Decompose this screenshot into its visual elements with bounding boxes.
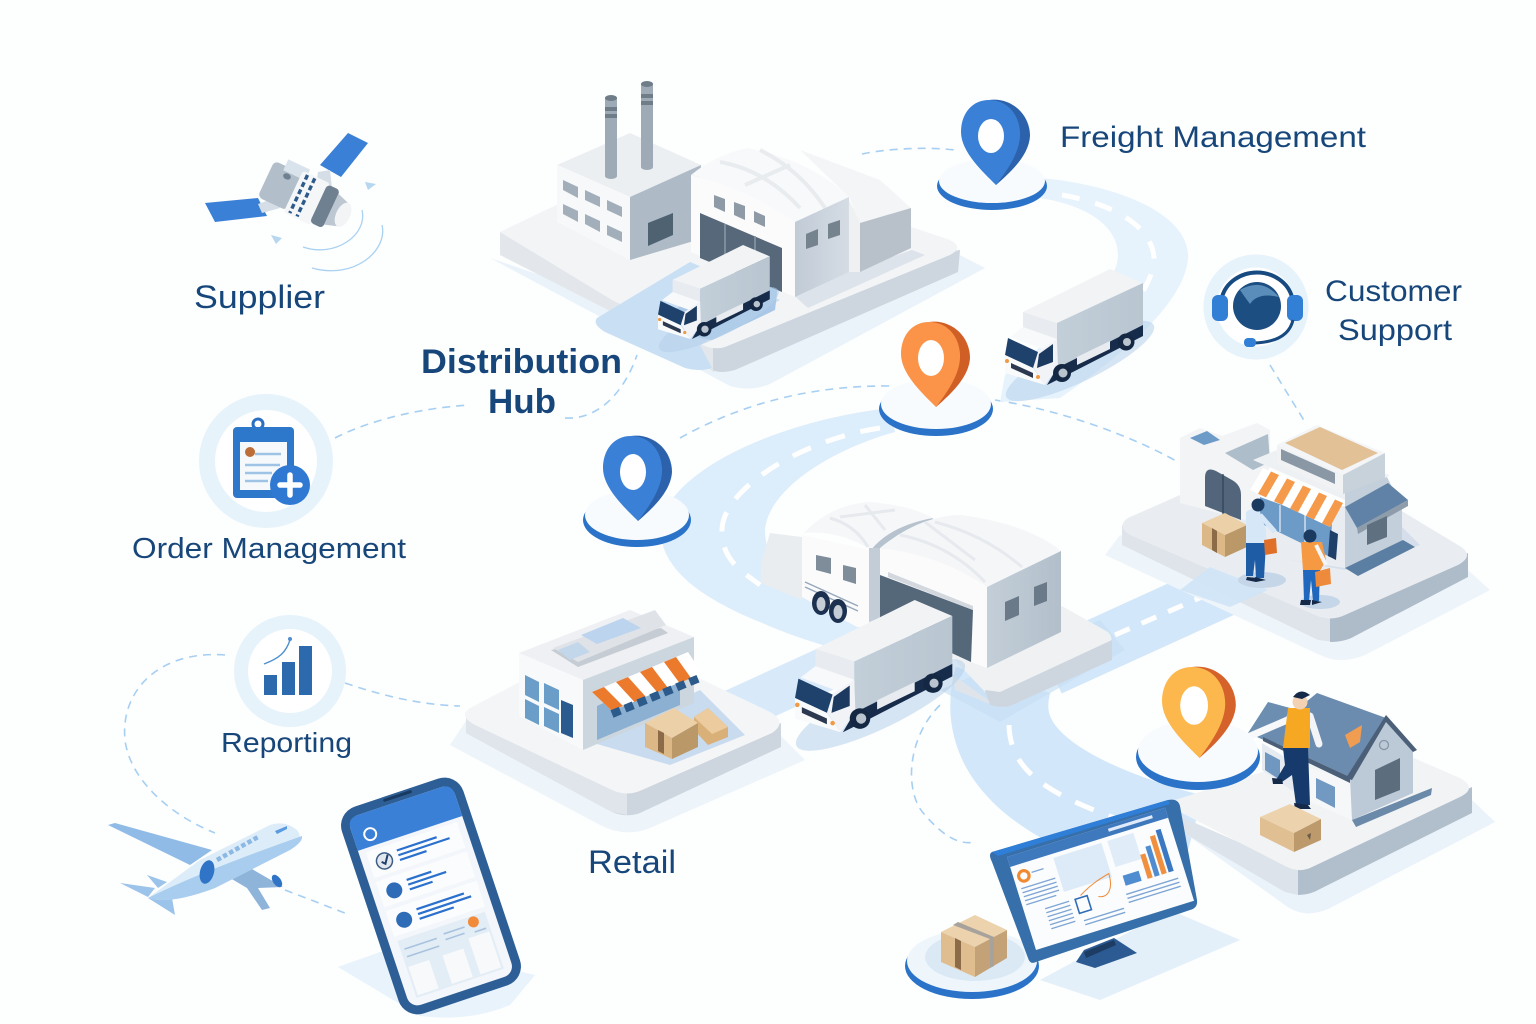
- pin: yellow home delivery: [1136, 667, 1260, 790]
- panel: distribution centre platform: [940, 605, 1125, 722]
- icon: store parcel: [1202, 513, 1247, 557]
- panel: home delivery platform: [1170, 750, 1495, 913]
- icon: delivery worker: [1248, 691, 1319, 809]
- icon: retail store building: [519, 610, 702, 750]
- icon: freight truck: [998, 269, 1162, 415]
- icon: house: [1248, 693, 1432, 827]
- panel: retail store platform: [450, 640, 805, 832]
- icon: retail parcels: [645, 708, 728, 759]
- pin: blue waypoint: [583, 436, 691, 547]
- icon: store staff member: [1238, 498, 1286, 588]
- heading: distribution hub: [421, 343, 622, 421]
- road: freight to hub truck: [1000, 178, 1188, 402]
- icon: distribution centre warehouse: [761, 502, 1061, 668]
- heading: retail: Retail: [588, 844, 676, 880]
- road: curve past distribution centre: [661, 408, 905, 662]
- heading: customer support: [1325, 275, 1462, 347]
- connector lines: [125, 148, 1305, 915]
- pin: orange waypoint: [879, 322, 993, 436]
- pin: freight management: [937, 100, 1047, 210]
- icon: central delivery truck: [786, 600, 975, 766]
- heading: distribution hub: Distribution: [421, 343, 622, 381]
- heading: reporting: Reporting: [221, 727, 352, 758]
- icon: store customer with bag: [1300, 530, 1340, 609]
- icon: satellite: [205, 133, 383, 271]
- heading: customer support: Customer: [1325, 275, 1462, 308]
- icon: customer store building: [1180, 423, 1415, 576]
- icon: parcel on base: [905, 915, 1039, 999]
- icon: hub warehouse: [691, 148, 911, 297]
- icon: customer support headset: [1210, 261, 1303, 353]
- heading: distribution hub: Hub: [488, 383, 556, 421]
- heading: customer support: Support: [1338, 314, 1453, 347]
- road crossing store platform: [1180, 567, 1268, 607]
- icon: hub delivery truck: [652, 245, 786, 363]
- panel: customer store platform: [1105, 495, 1490, 660]
- panel: distribution hub platform: [490, 165, 985, 389]
- icon: order management clipboard: [207, 402, 325, 520]
- icon: airplane: [108, 823, 302, 915]
- road: retail to customer store: [725, 570, 1265, 715]
- road: curve to home delivery: [999, 680, 1190, 843]
- heading: supplier: Supplier: [194, 279, 325, 315]
- icon: factory with chimneys: [557, 81, 701, 260]
- icon: monitor dashboard: [990, 800, 1240, 1000]
- icon: reporting chart: [241, 622, 339, 720]
- heading: freight management: Freight Management: [1060, 121, 1367, 154]
- heading: order management: Order Management: [132, 533, 406, 565]
- icon: home parcel: [1260, 804, 1321, 852]
- icon: smartphone: [336, 772, 535, 1020]
